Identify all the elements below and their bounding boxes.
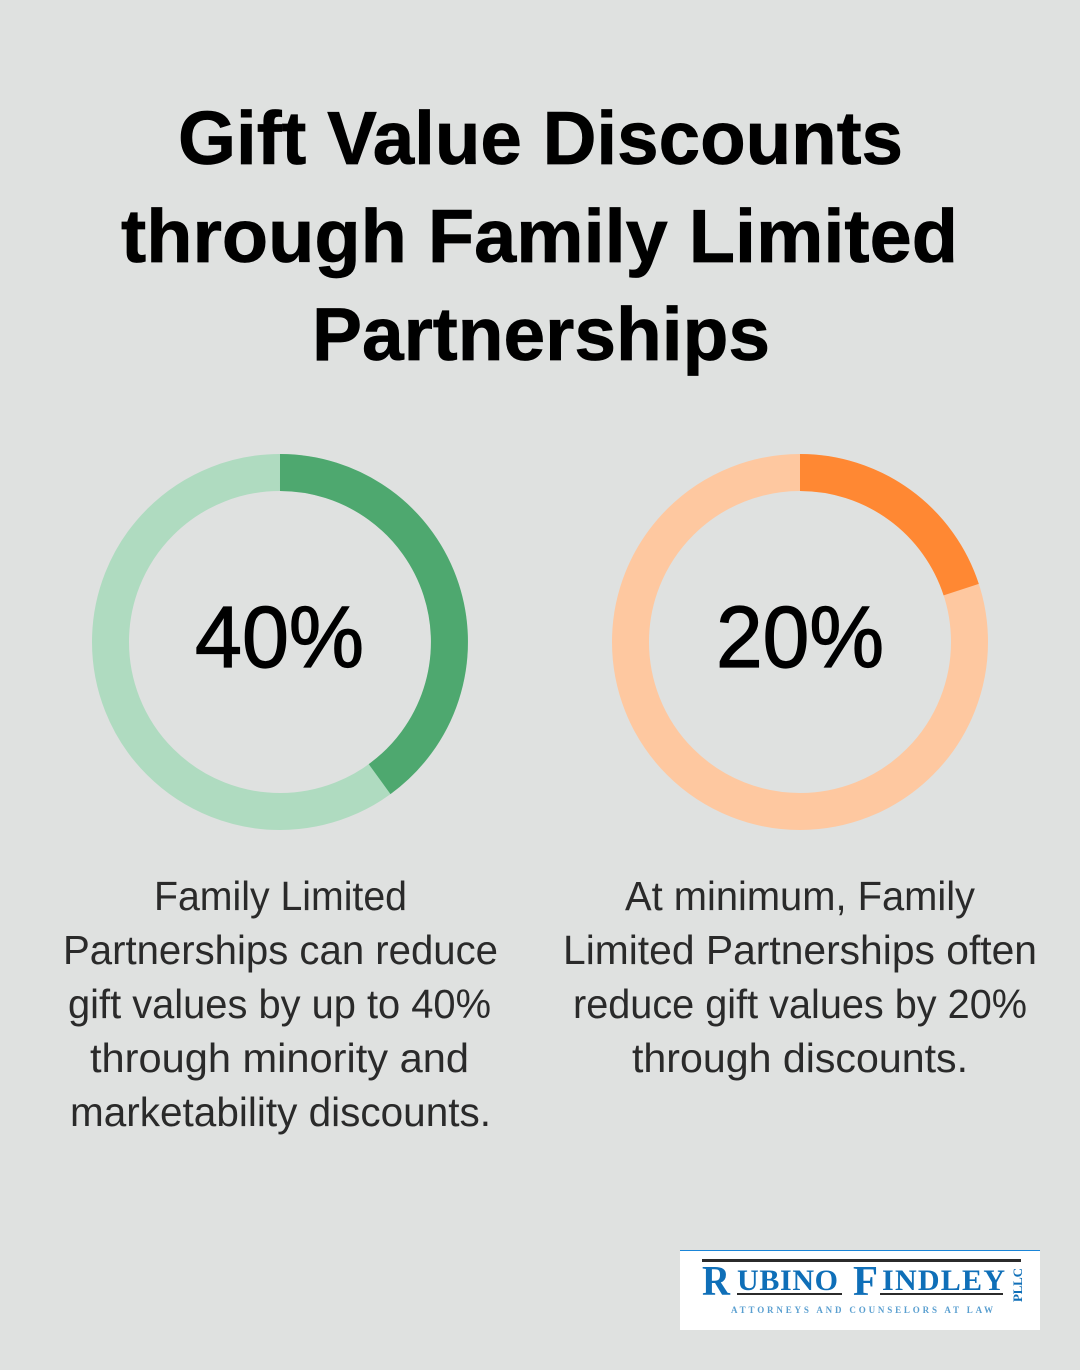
donut chart: 40%: [110, 472, 450, 812]
logo: Rubino Findley PLLC: F: [853, 1259, 878, 1305]
value: 20%: 20%: [716, 589, 884, 686]
description: 20%: reduce gift values by 20%: [573, 981, 1027, 1027]
panel: 40% discount: [63, 472, 498, 1135]
description: 20%: Limited Partnerships often: [563, 927, 1037, 973]
title: Partnerships: [312, 292, 770, 376]
description: 40%: through minority and: [90, 1035, 469, 1081]
description: 20%: [563, 873, 1037, 1081]
panel: 20% discount: [563, 472, 1037, 1081]
donut chart: 20%: [630, 472, 970, 812]
description: 40%: Family Limited: [154, 873, 407, 919]
logo: Rubino Findley PLLC: [680, 1250, 1040, 1330]
description: 20%: At minimum, Family: [625, 873, 975, 919]
logo: Rubino Findley PLLC: R: [702, 1259, 731, 1305]
logo: Rubino Findley PLLC: PLLC: [1010, 1268, 1025, 1302]
logo: Rubino Findley PLLC: UBINO: [737, 1264, 838, 1297]
title: Gift Value Discounts: [178, 96, 903, 180]
logo: Rubino Findley PLLC: INDLEY: [882, 1264, 1005, 1297]
logo: Rubino Findley PLLC: ATTORNEYS AND COUNSELORS AT LAW: [731, 1305, 993, 1315]
title: [121, 96, 958, 376]
title: through Family Limited: [121, 194, 958, 278]
description: 40%: gift values by up to 40%: [68, 981, 491, 1027]
value: 40%: 40%: [195, 589, 364, 686]
description: 40%: Partnerships can reduce: [63, 927, 498, 973]
description: 40%: [63, 873, 498, 1135]
description: 20%: through discounts.: [632, 1035, 968, 1081]
description: 40%: marketability discounts.: [70, 1089, 491, 1135]
